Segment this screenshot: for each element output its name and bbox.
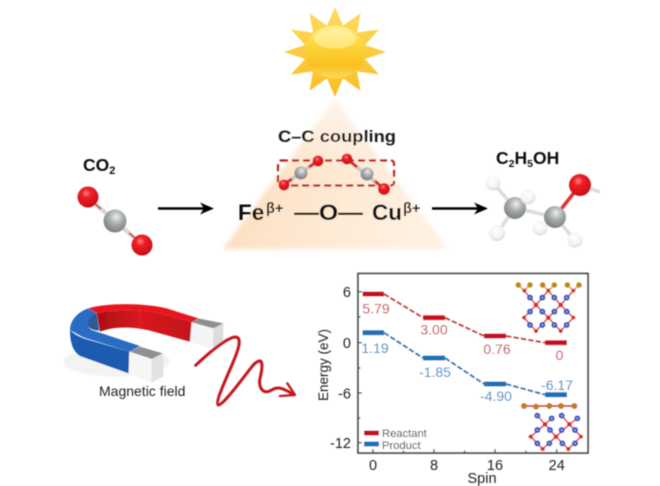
light triangle (223, 99, 448, 249)
catalyst formula: β+ (266, 201, 283, 217)
catalyst formula: —O— (294, 200, 364, 225)
reactant series: 0.76 (483, 341, 511, 357)
product series: -6.17 (541, 377, 573, 393)
y axis labels: 0 (343, 336, 351, 352)
chart frame (358, 274, 588, 453)
reactant series: 5.79 (362, 300, 390, 316)
line chart: energy vs spin (316, 274, 588, 486)
label: C2H5OH: OH (533, 148, 559, 168)
label: magnetic field: Magnetic field (99, 383, 185, 399)
label: C2H5OH: 5 (527, 158, 533, 170)
x axis labels: 0 (369, 458, 377, 474)
axis title: energy: Energy (eV) (316, 329, 331, 401)
reactant series (362, 292, 567, 363)
red inner face (97, 310, 192, 342)
y axis labels (330, 285, 351, 452)
red pole tip (192, 318, 223, 328)
reactant series: 3.00 (420, 322, 448, 338)
legend (364, 428, 428, 452)
label: C2H5OH: 2 (509, 158, 515, 170)
inset: high-spin crystal structure (516, 282, 582, 333)
icon: horseshoe magnet (63, 304, 223, 383)
y axis labels: -12 (330, 436, 351, 452)
label: C2H5OH: C (496, 148, 509, 168)
red top surface (88, 304, 198, 322)
molecule: ethanol (486, 174, 600, 248)
label: C2H5OH: H (514, 148, 527, 168)
inner dark curve (88, 313, 99, 331)
arrow: CO2 to catalyst (158, 202, 214, 214)
C-C coupled dimer in dashed box (278, 154, 394, 195)
x axis labels: 8 (430, 458, 438, 474)
legend: Product (382, 440, 421, 452)
catalyst formula: Cu (372, 200, 402, 225)
icon: sun (284, 7, 386, 97)
molecule: CO2 (78, 186, 152, 256)
inset: low-spin crystal structure (521, 403, 583, 451)
x axis labels (369, 458, 565, 474)
y axis labels: -6 (338, 386, 351, 402)
label: CO2: CO (83, 155, 109, 175)
catalyst formula (238, 200, 420, 225)
blue top surface (70, 308, 140, 352)
label: CO2: 2 (109, 165, 115, 177)
product series: -1.85 (419, 364, 451, 380)
product series (361, 330, 573, 404)
legend: Reactant (382, 428, 428, 440)
heading: C-C coupling: C–C coupling (278, 127, 396, 146)
arrow: catalyst to ethanol (432, 202, 488, 214)
blue pole tip (129, 347, 163, 359)
reactant series: 0 (556, 347, 564, 363)
x axis labels: 24 (549, 458, 565, 474)
catalyst formula: Fe (238, 200, 264, 225)
arrow: magnetic wave (196, 337, 295, 405)
product series: -4.90 (480, 388, 512, 404)
x axis labels: 16 (487, 458, 503, 474)
blue front face (70, 330, 129, 373)
product series: 1.19 (361, 340, 389, 356)
catalyst formula: β+ (403, 201, 420, 217)
y axis labels: 6 (343, 285, 351, 301)
